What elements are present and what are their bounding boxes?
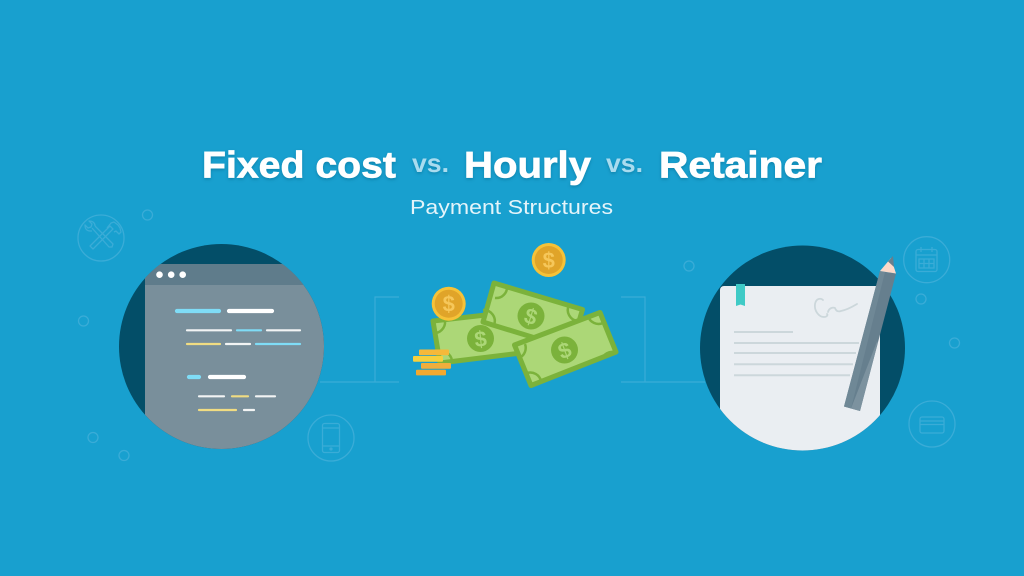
window header	[145, 264, 304, 285]
left connector bracket	[320, 297, 399, 382]
icon: credit card	[909, 401, 955, 447]
coin stack	[413, 350, 451, 375]
code lines	[177, 311, 300, 410]
signature	[815, 299, 857, 317]
title: Hourly	[464, 144, 591, 186]
pencil	[844, 256, 896, 411]
bill: left: $	[473, 326, 488, 352]
icon: calendar	[904, 237, 950, 283]
bill: left	[433, 310, 537, 363]
coin: left	[432, 287, 466, 321]
coin: left: $	[443, 292, 455, 316]
window body	[145, 264, 324, 449]
document lines	[734, 332, 859, 375]
panel: fixed cost code window	[119, 244, 324, 449]
subtitle: Payment Structures	[410, 196, 613, 219]
right connector bracket	[621, 297, 705, 382]
title: vs.	[606, 148, 643, 178]
window dots	[156, 271, 186, 278]
bill: top: $	[521, 303, 540, 330]
title: Fixed cost	[202, 144, 396, 186]
paper	[720, 286, 880, 460]
bill: right	[514, 312, 616, 386]
icon: tools	[78, 215, 124, 261]
title	[202, 144, 822, 186]
decorative small circles	[78, 210, 960, 460]
title: Retainer	[659, 144, 822, 186]
panel: hourly money illustration	[413, 243, 616, 386]
coin: top: $	[543, 248, 555, 273]
bill: top	[483, 283, 582, 349]
title: vs.	[412, 148, 449, 178]
icon: phone	[308, 415, 354, 461]
panel: retainer contract	[700, 246, 905, 460]
coin: top	[532, 243, 566, 277]
bill: right: $	[555, 337, 575, 364]
bookmark	[736, 284, 745, 306]
